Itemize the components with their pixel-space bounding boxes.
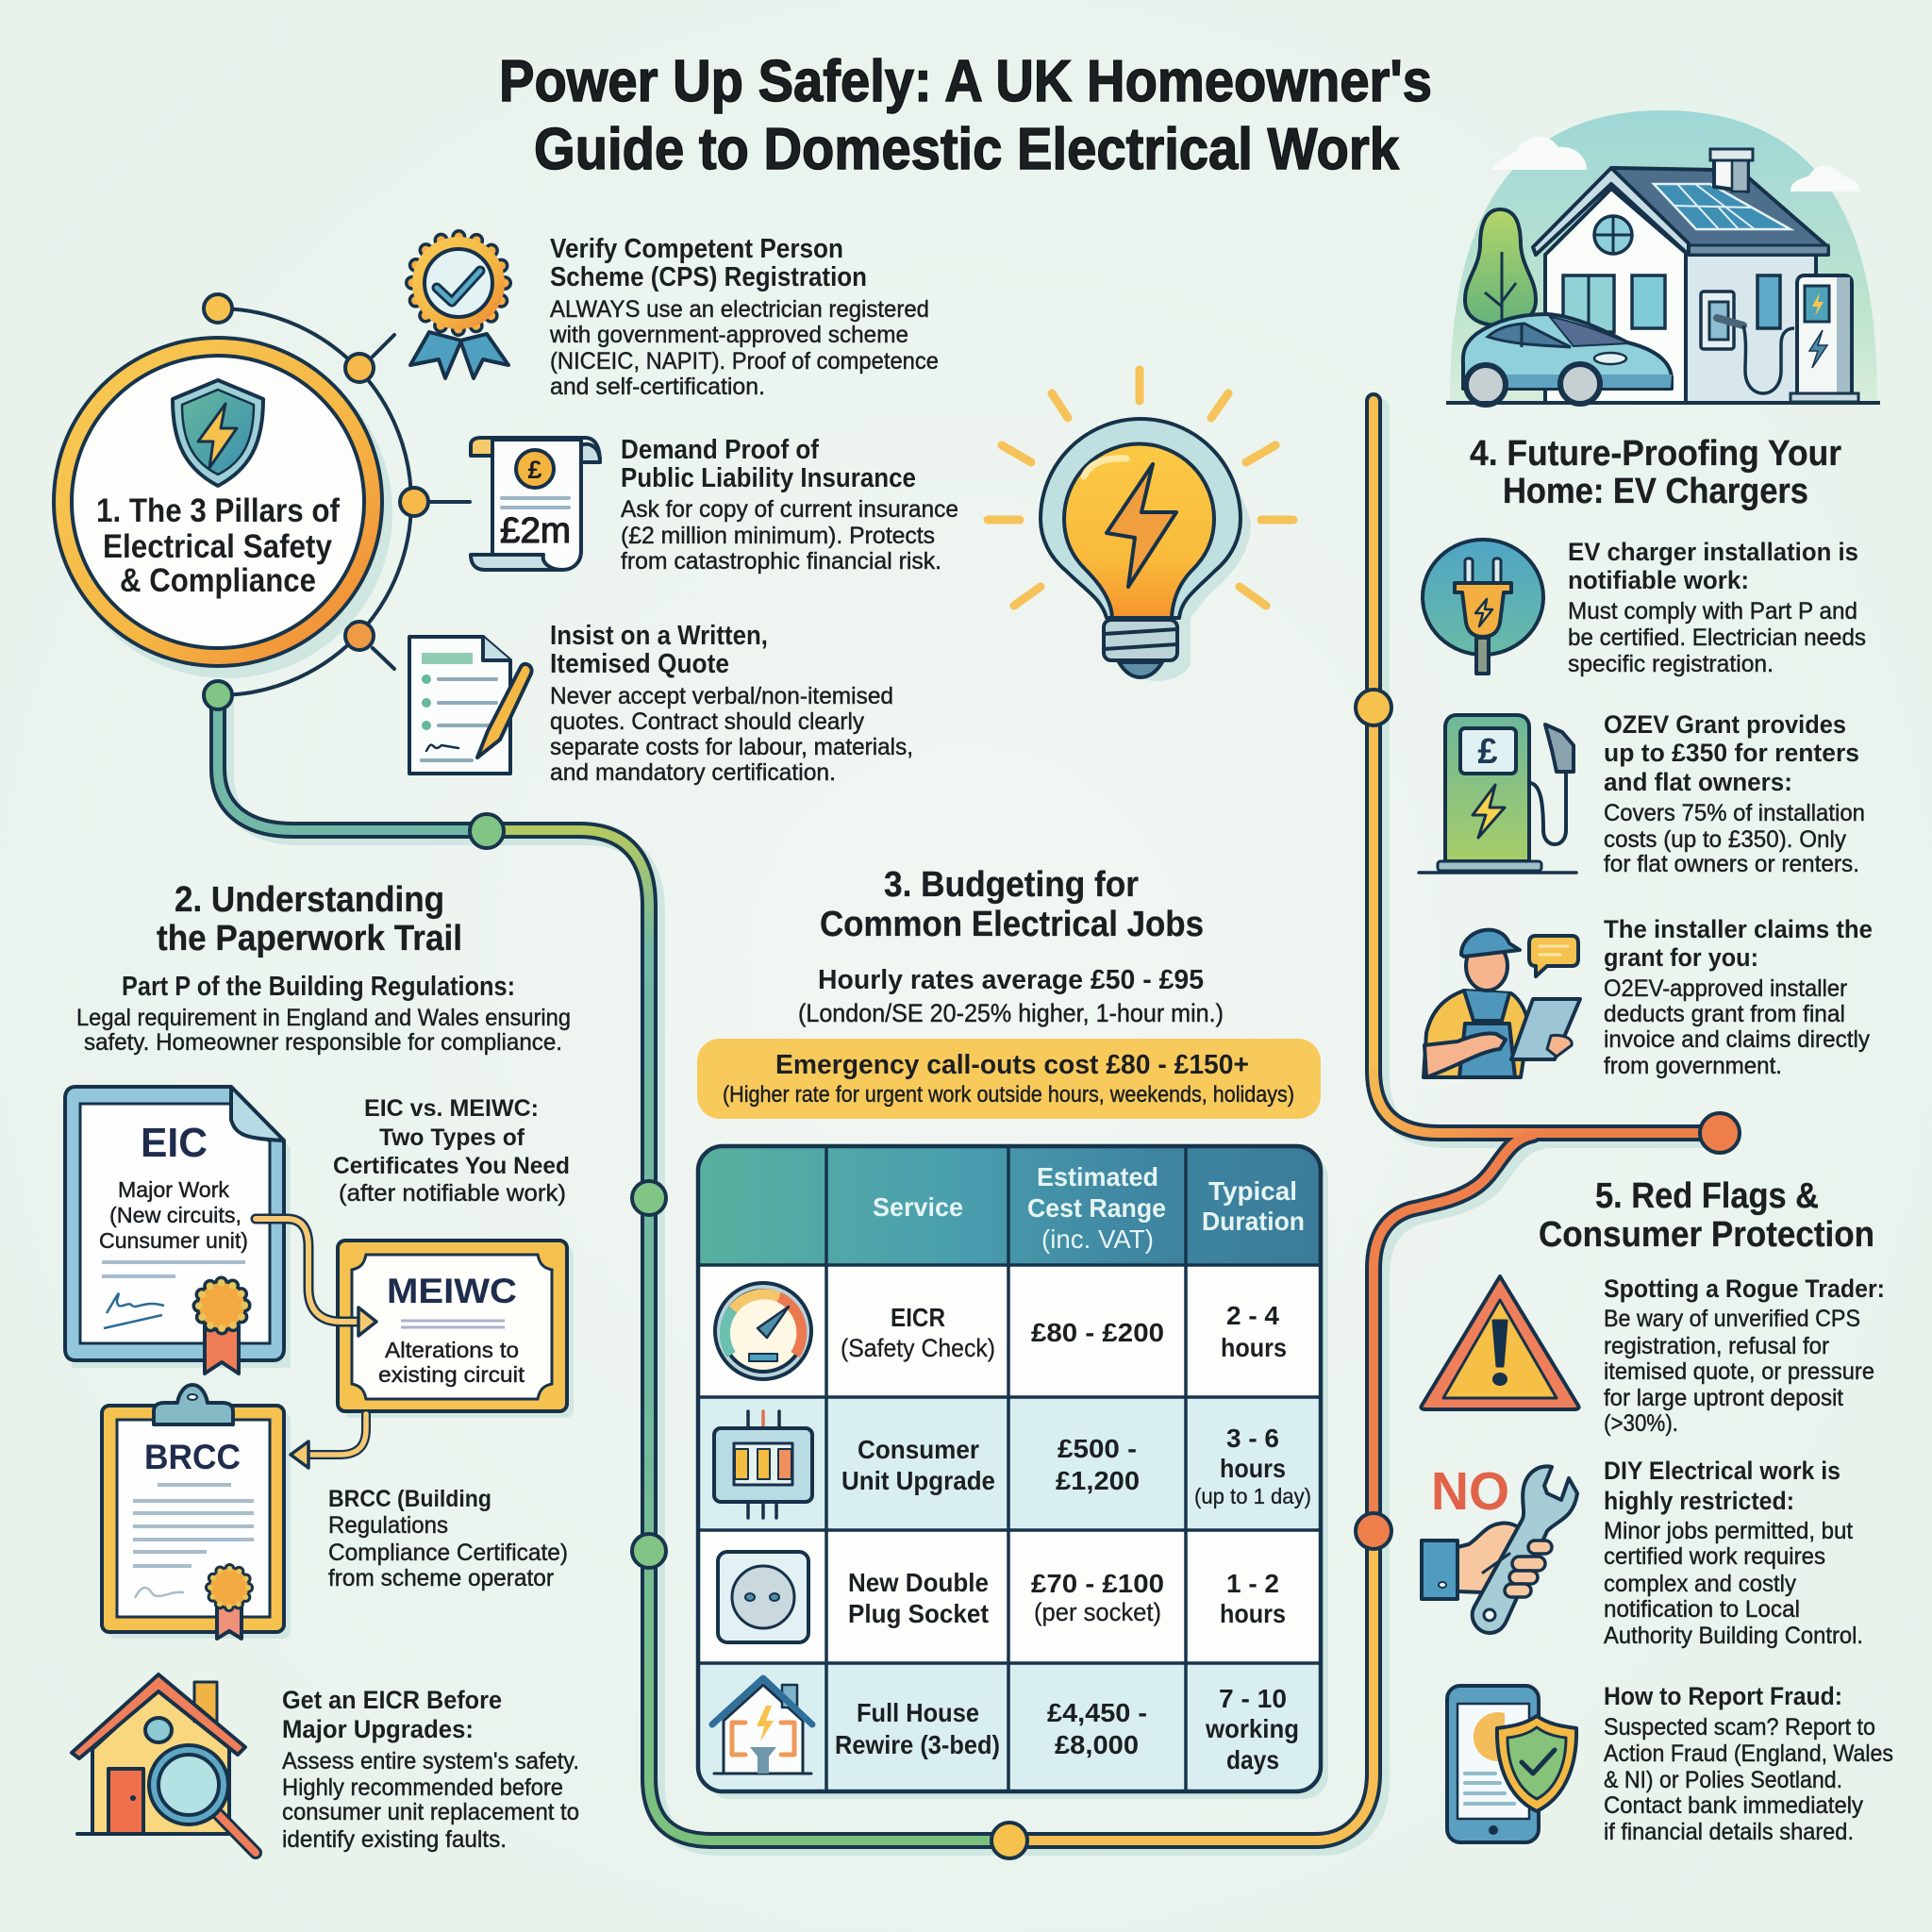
table header: (inc. VAT) <box>1041 1224 1154 1254</box>
text: EIC vs MEIWC: EIC vs. MEIWC: <box>364 1095 539 1122</box>
text: installer claims: grant for you: <box>1604 943 1758 972</box>
heading: section 2: the Paperwork Trail <box>157 919 462 958</box>
text: rogue trader: for large uptront deposit <box>1604 1385 1843 1411</box>
title: Power Up Safely: A UK Homeowner's <box>499 49 1432 114</box>
text: report fraud: Action Fraud (England, Wales <box>1604 1740 1893 1767</box>
text: itemised quote: quotes. Contract should clearly <box>550 708 864 735</box>
text: EIC vs MEIWC <box>333 1095 570 1207</box>
row: consumer unit: £1,200 <box>1056 1466 1140 1495</box>
icon: phone with shield <box>1447 1686 1576 1842</box>
card: EIC certificate: Major Work <box>118 1177 229 1202</box>
text: itemised quote: and mandatory certification. <box>550 759 836 786</box>
icon: insurance scroll <box>471 438 600 570</box>
text: DIY restricted: notification to Local <box>1604 1596 1800 1623</box>
icon: installer with tablet <box>1424 930 1580 1077</box>
table header: Cest Range <box>1027 1193 1166 1223</box>
row: EICR: hours <box>1221 1333 1287 1362</box>
text: CPS registration: (NICEIC, NAPIT). Proof of competence <box>550 348 939 375</box>
text: OZEV grant: OZEV Grant provides <box>1604 710 1846 739</box>
row: full rewire: Full House <box>857 1698 979 1727</box>
card: MEIWC certificate: Alterations to <box>385 1338 519 1362</box>
row: EICR: EICR <box>891 1303 945 1332</box>
text: OZEV grant: up to £350 for renters <box>1604 739 1859 767</box>
text: DIY restricted: Authority Building Control. <box>1604 1623 1863 1649</box>
text: installer claims: invoice and claims directly <box>1604 1026 1870 1053</box>
text: public liability insurance: Public Liability Insurance <box>621 463 916 493</box>
icon: plug socket <box>718 1552 808 1642</box>
text: hourly rates <box>798 965 1224 1027</box>
row: consumer unit <box>841 1424 1311 1508</box>
row: double socket: £70 - £100 <box>1031 1569 1164 1598</box>
text: DIY restricted: DIY Electrical work is <box>1604 1457 1840 1485</box>
heading: section 4: Home: EV Chargers <box>1503 472 1808 511</box>
row: double socket: Plug Socket <box>848 1599 989 1628</box>
text: EIC vs MEIWC: Certificates You Need <box>333 1153 570 1179</box>
text: report fraud: & NI) or Polies Seotland. <box>1604 1767 1842 1793</box>
text: itemised quote <box>550 621 913 786</box>
text: BRCC description: from scheme operator <box>328 1565 554 1591</box>
icon: NO with hand and wrench <box>1422 1461 1577 1633</box>
text: DIY restricted: Minor jobs permitted, but <box>1604 1518 1853 1544</box>
row: consumer unit: Unit Upgrade <box>841 1466 995 1495</box>
icon: light bulb <box>988 370 1293 681</box>
text: notifiable work: EV charger installation is <box>1568 538 1858 566</box>
row: full rewire: £4,450 - <box>1047 1698 1147 1727</box>
text: Part P <box>76 972 571 1056</box>
text: rogue trader: Spotting a Rogue Trader: <box>1604 1274 1885 1303</box>
text: OZEV grant: costs (up to £350). Only <box>1604 826 1846 853</box>
text: DIY restricted <box>1604 1457 1863 1649</box>
text: public liability insurance: Demand Proof of <box>621 435 819 465</box>
heading: section 5: Consumer Protection <box>1539 1215 1874 1255</box>
card: EIC certificate: Cunsumer unit) <box>99 1228 248 1253</box>
text: DIY restricted: complex and costly <box>1604 1571 1796 1597</box>
row: EICR <box>841 1301 1287 1362</box>
heading: section 1 <box>96 492 340 599</box>
table header: Typical <box>1208 1176 1297 1206</box>
card: BRCC certificate: BRCC <box>144 1438 241 1476</box>
panel: 4. EV chargers <box>1419 110 1880 1079</box>
text: CPS registration <box>549 234 939 400</box>
text: itemised quote: Insist on a Written, <box>550 621 768 651</box>
connector path between sections <box>218 401 1740 1858</box>
text: CPS registration: Scheme (CPS) Registration <box>550 262 867 292</box>
icon: shield with bolt <box>173 380 263 486</box>
text: BRCC description: BRCC (Building <box>328 1486 491 1512</box>
text: installer claims: deducts grant from final <box>1604 1001 1845 1027</box>
icon: EV plug <box>1423 540 1543 674</box>
table header <box>873 1162 1305 1254</box>
text: rogue trader: itemised quote, or pressure <box>1604 1358 1874 1385</box>
heading: section 3 <box>820 865 1204 944</box>
icon: quote document with pencil <box>409 637 532 774</box>
text: BRCC description: Compliance Certificate) <box>328 1540 568 1566</box>
text: EICR before upgrades: Assess entire system's safety. <box>282 1748 579 1774</box>
illustration: house with EV charger <box>1446 110 1880 405</box>
row: double socket: New Double <box>848 1568 989 1597</box>
card: EIC certificate: (New circuits, <box>109 1203 242 1227</box>
heading: section 2: 2. Understanding <box>175 880 444 920</box>
text: EIC vs MEIWC: (after notifiable work) <box>339 1180 566 1207</box>
round badge <box>52 336 392 678</box>
heading: section 4: 4. Future-Proofing Your <box>1470 434 1841 474</box>
text: public liability insurance: Ask for copy of current insurance <box>621 496 958 523</box>
text: CPS registration: with government-approved scheme <box>549 322 908 348</box>
text: EIC vs MEIWC: Two Types of <box>379 1124 525 1151</box>
row: double socket: (per socket) <box>1034 1598 1161 1626</box>
heading: section 2 <box>157 880 462 958</box>
row: full rewire: working <box>1205 1714 1299 1743</box>
row: double socket: 1 - 2 <box>1226 1569 1279 1598</box>
text: itemised quote: separate costs for labour, materials, <box>550 734 913 760</box>
text: itemised quote: Never accept verbal/non-itemised <box>550 683 893 709</box>
orbit arc with connector dots <box>204 294 470 709</box>
text: installer claims: from government. <box>1604 1053 1782 1079</box>
text: public liability insurance: from catastrophic financial risk. <box>621 548 941 575</box>
card: MEIWC certificate: existing circuit <box>378 1362 525 1387</box>
icon: rewired house <box>712 1678 812 1774</box>
panel: 5. red flags <box>1421 1176 1893 1845</box>
icon: fuel style charge pump <box>1419 715 1576 873</box>
icon: house with magnifier <box>72 1674 256 1853</box>
icon: fuel style charge pump: £ <box>1477 732 1498 772</box>
text: rogue trader: (>30%). <box>1604 1410 1678 1437</box>
row: full rewire: Rewire (3-bed) <box>835 1730 1000 1759</box>
row: EICR: (Safety Check) <box>841 1334 995 1362</box>
text: rogue trader: registration, refusal for <box>1604 1333 1829 1359</box>
text: EICR before upgrades: Major Upgrades: <box>282 1715 474 1743</box>
title <box>499 49 1432 182</box>
icon: rosette <box>410 237 508 378</box>
text: rogue trader <box>1604 1274 1885 1437</box>
heading: section 1: & Compliance <box>120 562 316 599</box>
card: MEIWC certificate <box>338 1241 574 1418</box>
icon: NO with hand and wrench: NO <box>1431 1461 1509 1522</box>
icon: warning triangle <box>1421 1276 1579 1409</box>
text: CPS registration: and self-certification. <box>550 374 765 400</box>
text: DIY restricted: highly restricted: <box>1604 1487 1794 1515</box>
table header: Estimated <box>1037 1162 1158 1191</box>
text: EICR before upgrades: Highly recommended before <box>282 1774 563 1801</box>
panel: 3. budgeting <box>697 865 1328 1799</box>
text: Part P: Part P of the Building Regulations: <box>122 972 515 1002</box>
icon: insurance scroll: £ <box>527 456 542 484</box>
row: consumer unit: £500 - <box>1058 1434 1137 1463</box>
card: EIC certificate: EIC <box>141 1120 208 1166</box>
text: report fraud: How to Report Fraud: <box>1604 1682 1842 1710</box>
callout: emergency call-outs: (Higher rate for urgent work outside hours, weekends, holidays) <box>723 1082 1294 1108</box>
text: OZEV grant: and flat owners: <box>1604 768 1792 796</box>
heading: section 3: 3. Budgeting for <box>884 865 1139 905</box>
row: consumer unit: Consumer <box>858 1435 979 1464</box>
row: EICR: 2 - 4 <box>1226 1301 1279 1330</box>
text: public liability insurance <box>621 435 958 575</box>
text: BRCC description <box>328 1486 568 1591</box>
text: public liability insurance: (£2 million minimum). Protects <box>621 523 935 549</box>
row: EICR: £80 - £200 <box>1031 1318 1164 1347</box>
text: hourly rates: Hourly rates average £50 - £95 <box>818 965 1204 995</box>
icon: insurance scroll: £2m <box>500 511 571 551</box>
text: CPS registration: ALWAYS use an electrician registered <box>550 296 929 323</box>
text: notifiable work: Must comply with Part P and <box>1568 598 1857 625</box>
row: double socket <box>848 1568 1286 1628</box>
callout: emergency call-outs: Emergency call-outs cost £80 - £150+ <box>775 1050 1249 1080</box>
text: itemised quote: Itemised Quote <box>550 649 729 679</box>
text: CPS registration: Verify Competent Person <box>550 234 843 264</box>
text: Part P: Legal requirement in England and Wales ensuring <box>76 1005 571 1031</box>
panel: 2. paperwork trail <box>65 880 579 1853</box>
arrow: MEIWC to BRCC <box>291 1414 366 1468</box>
heading: section 5: 5. Red Flags & <box>1595 1176 1819 1216</box>
text: hourly rates: (London/SE 20-25% higher, 1-hour min.) <box>798 999 1224 1027</box>
text: notifiable work <box>1568 538 1866 677</box>
text: rogue trader: Be wary of unverified CPS <box>1604 1306 1860 1332</box>
text: EICR before upgrades <box>282 1686 579 1853</box>
arrow: EIC to MEIWC <box>256 1219 376 1336</box>
icon: consumer unit <box>714 1411 812 1518</box>
text: report fraud: Suspected scam? Report to <box>1604 1714 1875 1740</box>
row: full rewire <box>835 1684 1299 1774</box>
row: consumer unit: (up to 1 day) <box>1194 1484 1311 1508</box>
card: EIC certificate <box>65 1087 291 1374</box>
table header: Service <box>873 1192 963 1222</box>
heading: section 1: Electrical Safety <box>103 528 332 565</box>
row: consumer unit: hours <box>1220 1454 1286 1483</box>
text: OZEV grant: for flat owners or renters. <box>1604 851 1859 877</box>
text: installer claims: O2EV-approved installer <box>1604 975 1847 1002</box>
text: report fraud: Contact bank immediately <box>1604 1792 1863 1819</box>
row: consumer unit: 3 - 6 <box>1226 1424 1279 1453</box>
text: installer claims <box>1604 915 1873 1079</box>
callout: emergency call-outs <box>697 1039 1321 1119</box>
panel: 1. the three pillars <box>52 234 958 786</box>
text: notifiable work: notifiable work: <box>1568 566 1749 594</box>
row: double socket: hours <box>1220 1599 1286 1628</box>
card: BRCC certificate <box>102 1385 291 1639</box>
text: notifiable work: be certified. Electrician needs <box>1568 625 1866 651</box>
row: full rewire: days <box>1226 1745 1279 1774</box>
text: DIY restricted: certified work requires <box>1604 1543 1825 1570</box>
text: EICR before upgrades: consumer unit replacement to <box>282 1799 579 1825</box>
text: BRCC description: Regulations <box>328 1512 448 1539</box>
heading: section 5 <box>1539 1176 1874 1255</box>
text: EICR before upgrades: identify existing faults. <box>282 1826 507 1853</box>
text: report fraud: if financial details shared. <box>1604 1819 1854 1845</box>
text: Part P: safety. Homeowner responsible for compliance. <box>84 1029 562 1056</box>
text: notifiable work: specific registration. <box>1568 651 1774 677</box>
text: installer claims: The installer claims the <box>1604 915 1873 943</box>
heading: section 1: 1. The 3 Pillars of <box>96 492 340 529</box>
title: Guide to Domestic Electrical Work <box>534 117 1399 182</box>
card: MEIWC certificate: MEIWC <box>387 1272 517 1310</box>
table: costs <box>698 1146 1328 1799</box>
row: full rewire: 7 - 10 <box>1219 1684 1287 1713</box>
row: full rewire: £8,000 <box>1055 1730 1139 1759</box>
heading: section 3: Common Electrical Jobs <box>820 905 1204 944</box>
icon: gauge <box>715 1283 811 1379</box>
heading: section 4 <box>1470 434 1841 511</box>
table header: Duration <box>1202 1207 1305 1236</box>
text: OZEV grant: Covers 75% of installation <box>1604 800 1865 826</box>
text: report fraud <box>1604 1682 1893 1845</box>
text: OZEV grant <box>1604 710 1865 877</box>
text: EICR before upgrades: Get an EICR Before <box>282 1686 502 1714</box>
